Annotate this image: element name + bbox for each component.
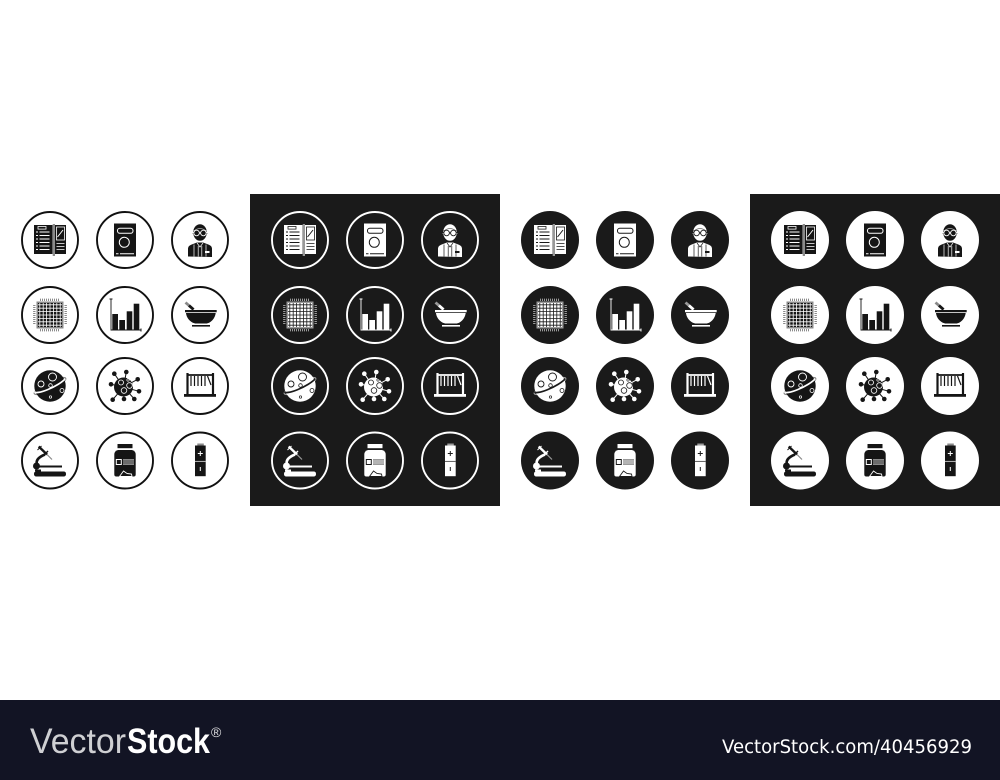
icon: bar chart [97,287,153,343]
icon: planet [771,357,829,415]
icon: newton cradle [422,358,478,414]
icon: newton cradle [671,357,729,415]
icon: bar chart [596,286,654,344]
icon: bar chart [347,287,403,343]
icon: mortar and pestle [671,286,729,344]
icon: document cover [846,211,904,269]
icon: scientist [671,211,729,269]
footer logo [30,722,222,761]
footer logo: ® [211,724,222,740]
icon: planet [22,358,78,414]
icon: medicine jar [596,432,654,490]
icon: microscope [272,432,328,488]
icon: open book [272,212,328,268]
icon: battery [921,432,979,490]
icon: open book [22,212,78,268]
icon: battery [422,432,478,488]
icon: mortar and pestle [172,287,228,343]
icon: mortar and pestle [921,286,979,344]
icon: medicine jar [846,432,904,490]
icon: virus [347,358,403,414]
icon: planet [521,357,579,415]
icon: processor chip [521,286,579,344]
icon: scientist [422,212,478,268]
icon: medicine jar [347,432,403,488]
icon: battery [172,432,228,488]
icon: document cover [97,212,153,268]
icon: document cover [347,212,403,268]
icon: battery [671,432,729,490]
icon: open book [521,211,579,269]
footer logo: Vector [30,722,126,761]
icon: microscope [771,432,829,490]
panel: white background with outlined circles [22,212,228,488]
icon: newton cradle [921,357,979,415]
icon: medicine jar [97,432,153,488]
icon: mortar and pestle [422,287,478,343]
icon: microscope [521,432,579,490]
icon: virus [97,358,153,414]
icon: newton cradle [172,358,228,414]
icon: scientist [172,212,228,268]
icon: virus [846,357,904,415]
icon: document cover [596,211,654,269]
footer logo: Stock [127,722,210,761]
icon: processor chip [272,287,328,343]
icon: scientist [921,211,979,269]
icon: planet [272,358,328,414]
panel: dark background with outlined circles [250,194,500,506]
icon: virus [596,357,654,415]
icon: processor chip [22,287,78,343]
panel: dark background with filled white circles [750,194,1000,506]
panel: white background with filled black circles [521,211,729,490]
icon: open book [771,211,829,269]
icon: microscope [22,432,78,488]
footer image id: VectorStock.com/40456929 [722,736,972,758]
footer bar [0,700,1000,780]
icon: processor chip [771,286,829,344]
icon: bar chart [846,286,904,344]
